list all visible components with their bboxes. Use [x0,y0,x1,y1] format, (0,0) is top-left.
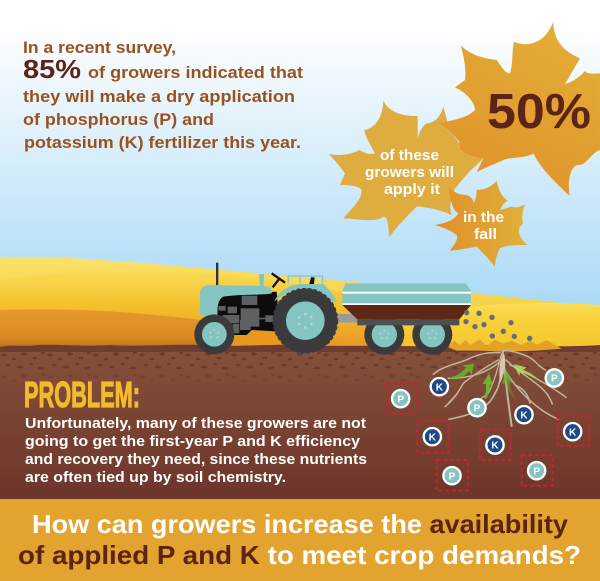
fender [274,284,337,302]
nutrient letters [397,374,577,482]
survey text block [23,38,303,152]
rear tractor wheel [273,289,337,353]
small leaf: in the fall: in the [463,210,504,226]
problem heading: PROBLEM: [24,374,140,415]
problem body text: Unfortunately, many of these growers are not [25,416,366,432]
survey text block: In a recent survey, [23,38,176,57]
spreader hopper [342,283,471,325]
soil speckles [1,352,600,378]
small leaf: in the fall: fall [474,227,497,243]
nutrient K circles [424,378,581,454]
small leaf: in the fall [435,181,527,267]
problem body text: are often tied up by soil chemistry. [25,470,286,486]
nutrient letters: K [491,441,499,452]
bottom question banner: How can growers increase the availability [32,509,569,539]
survey text block: of phosphorus (P) and [23,110,214,129]
bottom question banner: of applied P and K to meet crop demands? [18,540,581,570]
problem body text: going to get the first-year P and K efficiency [25,434,360,450]
steering wheel [272,273,285,287]
medium leaf: of these growers will apply it [328,100,483,237]
spreader wheels [364,315,452,355]
crop stubble [448,339,562,352]
rolling hills [0,257,600,350]
plant roots [433,350,566,426]
roots with nutrient uptake [386,310,589,491]
soil ground [0,345,600,500]
nutrient letters: P [551,374,558,385]
maple leaves with statistics [328,22,600,267]
radiator cap [259,274,264,286]
engine block [217,292,280,335]
hitch bar [330,314,358,323]
sky background [0,0,600,310]
nutrient letters: P [397,394,404,405]
medium leaf: of these growers will apply it: growers will [365,165,454,181]
front tractor wheel [194,314,234,354]
tied-up nutrient boxes [386,383,589,491]
nutrient letters: P [533,466,540,477]
survey text block: potassium (K) fertilizer this year. [24,133,301,152]
nutrient letters: K [520,410,528,421]
tractor and spreader [194,263,471,355]
tractor hood [200,285,272,317]
bottom question banner [0,499,600,581]
medium leaf: of these growers will apply it: apply it [384,182,440,198]
survey text block: of growers indicated that [88,63,303,82]
large leaf: 50%: 50% [487,85,591,139]
problem body text [25,416,367,486]
uptake arrows [450,363,537,403]
survey text block: they will make a dry application [23,87,295,106]
nutrient letters: P [449,471,456,482]
nutrient letters: K [569,427,577,438]
large leaf: 50% [438,22,600,196]
medium leaf: of these growers will apply it: of these [380,148,439,164]
85% statistic: 85% [23,54,81,84]
problem body text: and recovery they need, since these nutrients [25,452,367,468]
nutrient letters: K [429,432,437,443]
nutrient letters: K [436,382,444,393]
exhaust stack [216,263,218,286]
nutrient letters: P [474,403,481,414]
fertilizer pellets [463,310,532,341]
seat back and rail [288,276,323,283]
nutrient P circles [392,369,563,484]
